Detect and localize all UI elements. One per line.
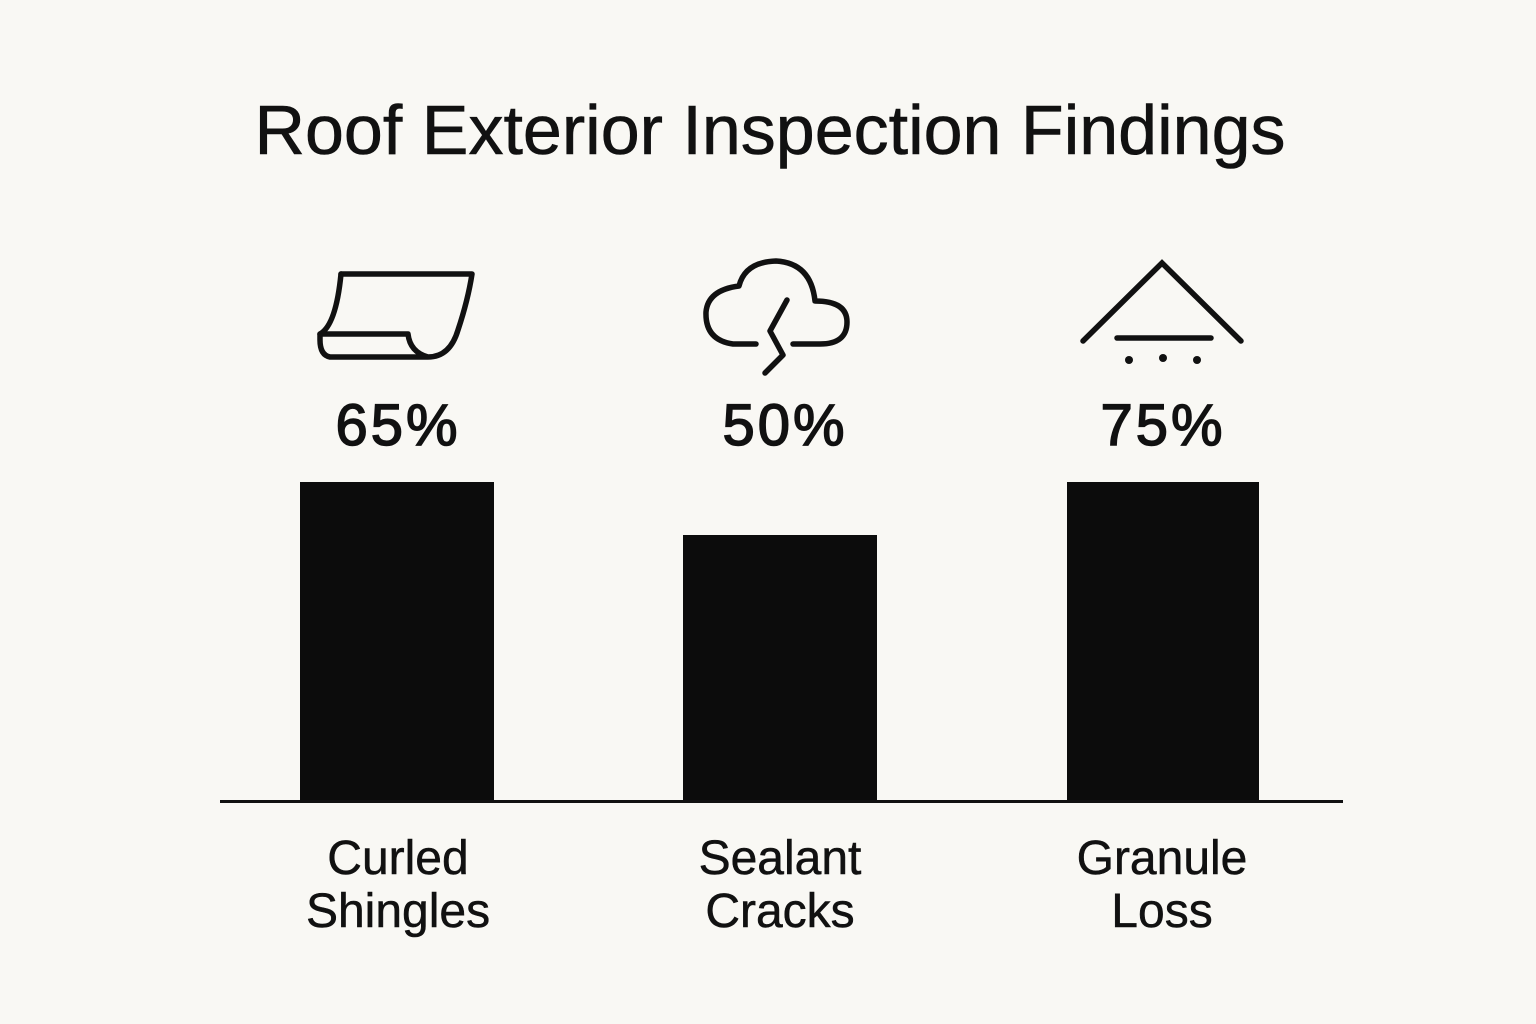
- percentages: 65%: [335, 393, 461, 458]
- percentages: 50%: [722, 393, 848, 458]
- category labels: [306, 832, 1247, 938]
- bar: granule loss: [1067, 482, 1259, 802]
- bar chart: [220, 482, 1343, 803]
- bar: sealant cracks: [683, 535, 877, 802]
- category labels: Sealant: [699, 832, 861, 885]
- category labels: Granule: [1077, 832, 1247, 885]
- percentages: 75%: [1100, 393, 1226, 458]
- title: Roof Exterior Inspection Findings: [254, 91, 1286, 169]
- category labels: Shingles: [306, 885, 490, 938]
- bar: curled shingles: [300, 482, 494, 802]
- category labels: Curled: [327, 832, 469, 885]
- category labels: Loss: [1111, 885, 1213, 938]
- category labels: Cracks: [705, 885, 855, 938]
- percentages: [335, 393, 1226, 458]
